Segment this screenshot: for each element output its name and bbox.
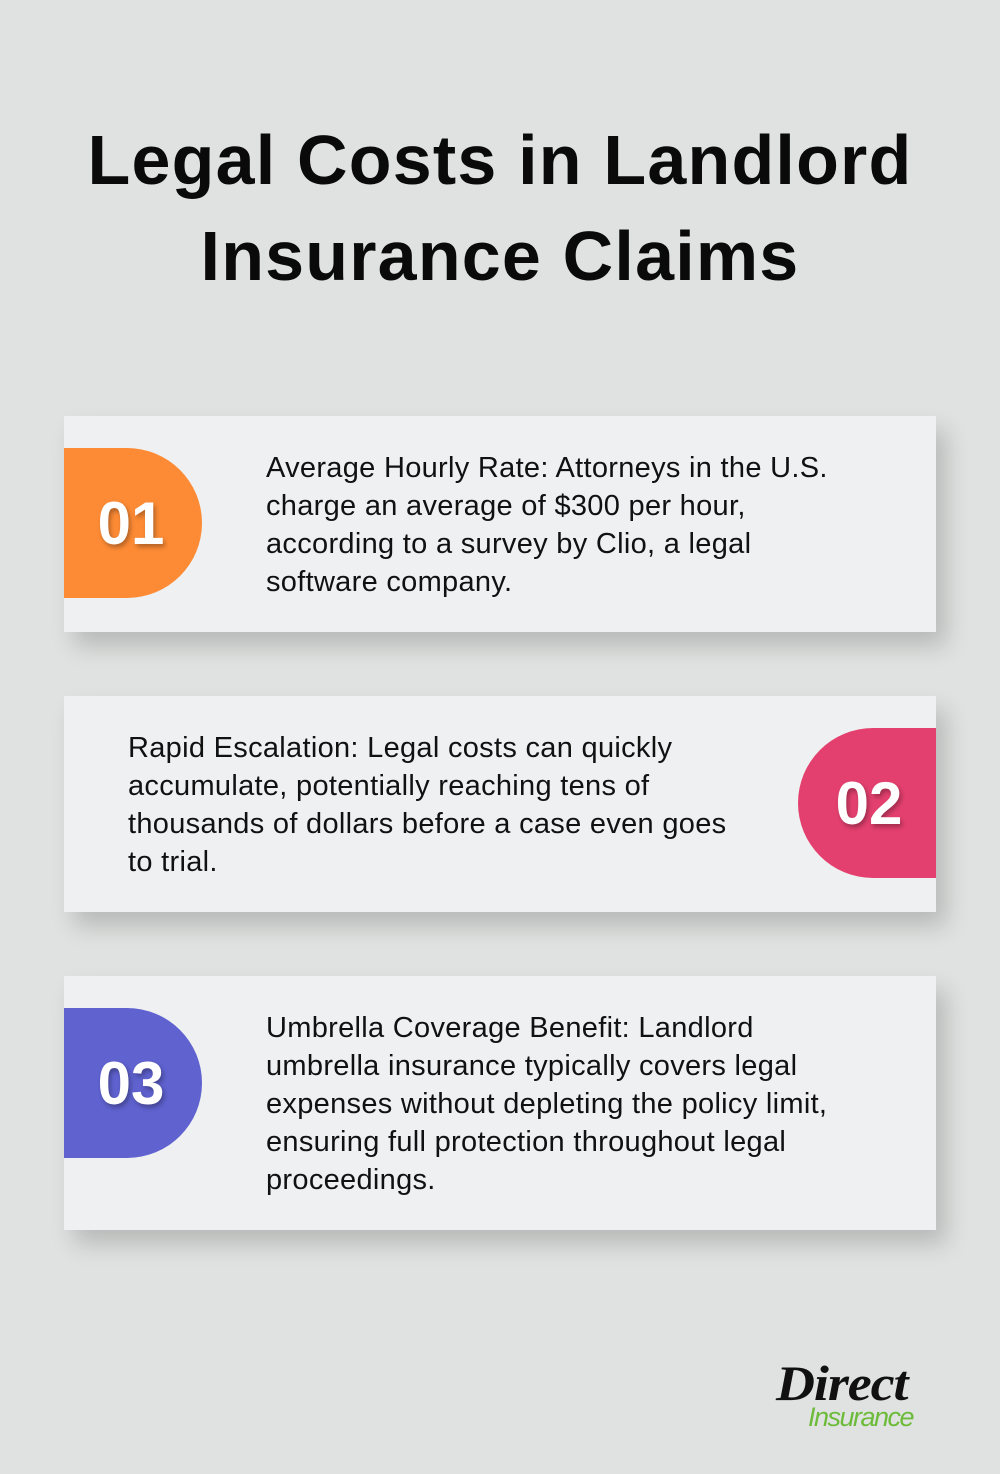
text 03: expenses without depleting the policy limit, [266, 1088, 827, 1120]
text 03: ensuring full protection throughout legal [266, 1126, 786, 1158]
text 01: according to a survey by Clio, a legal [266, 528, 751, 560]
text 01: software company. [266, 566, 512, 598]
title [88, 121, 912, 295]
badge 01 [64, 448, 202, 598]
text 03 [266, 1012, 827, 1196]
logo: Insurance [808, 1402, 913, 1432]
badge 01: 01 [98, 490, 164, 556]
text 01: Average Hourly Rate: Attorneys in the U.S. [266, 452, 828, 484]
title: Legal Costs in Landlord [88, 121, 912, 199]
badge 03: 03 [98, 1050, 164, 1116]
text 02: Rapid Escalation: Legal costs can quickly [128, 732, 672, 764]
badge 02: 02 [836, 770, 902, 836]
text 03: Umbrella Coverage Benefit: Landlord [266, 1012, 754, 1044]
title: Insurance Claims [201, 217, 799, 295]
text 02 [128, 732, 726, 878]
panel: item 03 [64, 976, 936, 1230]
logo [776, 1355, 914, 1432]
text 02: to trial. [128, 846, 218, 878]
text 02: accumulate, potentially reaching tens of [128, 770, 649, 802]
text 02: thousands of dollars before a case even goes [128, 808, 726, 840]
badge 02 [798, 728, 936, 878]
panel: item 01 [64, 416, 936, 632]
text 01 [266, 452, 828, 598]
text 03: umbrella insurance typically covers legal [266, 1050, 797, 1082]
logo: Direct [776, 1355, 907, 1411]
badge 03 [64, 1008, 202, 1158]
text 03: proceedings. [266, 1164, 436, 1196]
text 01: charge an average of $300 per hour, [266, 490, 746, 522]
panel: item 02 [64, 696, 936, 912]
